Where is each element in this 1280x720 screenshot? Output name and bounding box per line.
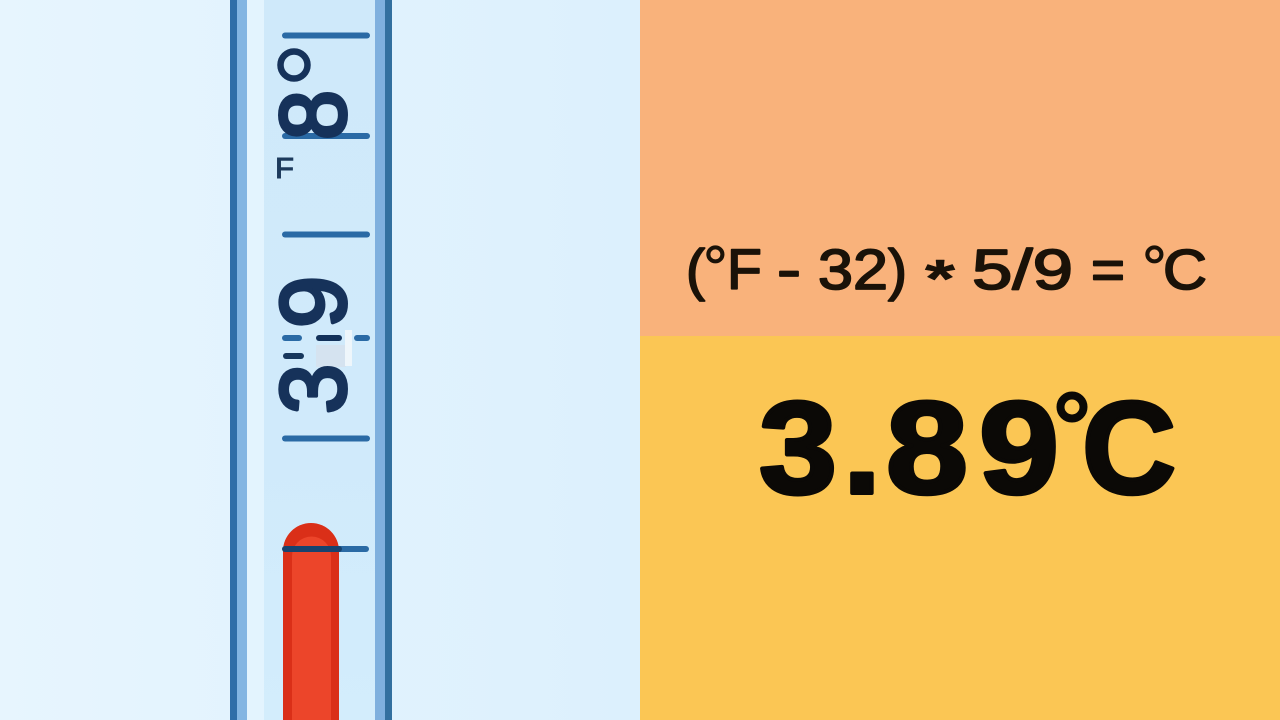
conversion formula: - — [777, 238, 801, 302]
panel: thermometer background — [0, 0, 640, 720]
result value: . — [843, 374, 881, 521]
conversion formula: ) — [888, 238, 907, 302]
result value: C — [1082, 374, 1176, 521]
result value — [759, 374, 1176, 521]
scale numeral 8: 8 — [261, 90, 365, 140]
thermometer glass tube — [230, 0, 392, 720]
current level tick mark — [285, 546, 366, 552]
scale numerals 3 and 9 — [261, 276, 365, 414]
scale numerals 3 and 9: 9 — [261, 276, 365, 328]
conversion formula — [686, 234, 1207, 309]
scale degree ring — [280, 52, 308, 78]
conversion formula: C — [1163, 238, 1207, 302]
result value: 8 — [886, 374, 968, 521]
conversion formula: ° — [1142, 234, 1167, 303]
broken tick mark with artefacts — [285, 330, 367, 367]
result value: 9 — [979, 374, 1059, 521]
conversion formula: ( — [686, 238, 705, 302]
panel: result — [640, 336, 1280, 720]
conversion formula: 5/9 — [972, 238, 1073, 302]
scale unit F: F — [275, 153, 294, 185]
conversion formula: ° — [703, 234, 728, 303]
conversion formula: 32 — [818, 238, 888, 302]
red mercury column — [283, 523, 339, 720]
conversion formula: = — [1091, 238, 1125, 302]
conversion formula: F — [727, 238, 762, 302]
thermometer — [230, 0, 392, 720]
scale tick marks — [285, 36, 367, 438]
scale numerals 3 and 9: 3 — [261, 364, 365, 414]
conversion formula: * — [925, 249, 955, 309]
panel: formula — [640, 0, 1280, 336]
result value: 3 — [759, 374, 837, 521]
